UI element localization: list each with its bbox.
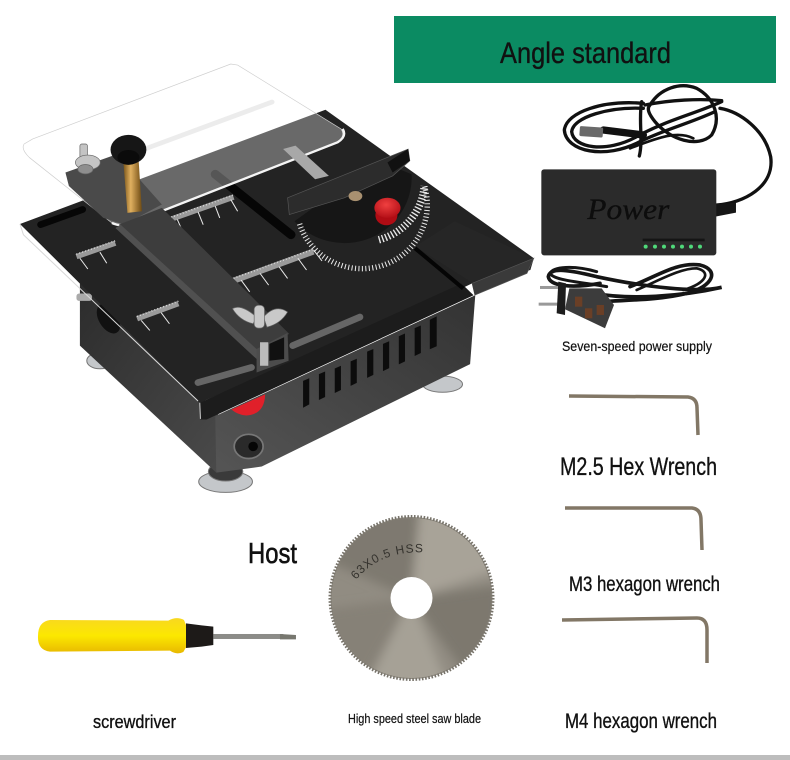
power switch	[231, 394, 265, 415]
label: seven-speed power supply: Seven-speed power supply	[562, 338, 712, 354]
DC plug	[579, 126, 603, 138]
mains cable	[548, 265, 722, 302]
red locking knob	[374, 198, 401, 225]
label: host: Host	[248, 538, 297, 570]
label: screwdriver: screwdriver	[93, 712, 176, 732]
vent slots	[303, 316, 437, 408]
power jack	[234, 434, 263, 458]
fence rail	[65, 154, 289, 372]
left side of base	[80, 282, 218, 473]
speed LEDs	[644, 245, 702, 249]
icon: M3 hex wrench	[565, 508, 702, 550]
blade marking: 63X0.5 HSS	[351, 544, 422, 578]
bottom gray bar	[0, 755, 790, 760]
illustration: saw blade	[328, 515, 494, 681]
label: M3 hexagon wrench: M3 hexagon wrench	[569, 573, 720, 596]
table plate	[20, 110, 534, 420]
ruler left lower	[137, 301, 178, 330]
illustration: screwdriver	[38, 618, 296, 653]
ruler left upper	[76, 241, 115, 269]
feet	[87, 353, 463, 492]
wing nut	[232, 305, 288, 328]
ruler middle	[231, 249, 322, 292]
heading banner	[394, 16, 776, 83]
illustration: seven-speed power supply	[539, 86, 771, 328]
ruler scales	[76, 195, 322, 330]
icon: M4 hex wrench	[562, 618, 707, 663]
icon: M2.5 hex wrench	[569, 396, 698, 435]
brass post with knob	[111, 135, 146, 213]
DC cable loops	[564, 86, 771, 205]
adapter body	[541, 169, 716, 255]
clear acrylic guard	[23, 64, 344, 225]
ruler upper	[165, 195, 238, 231]
label: M2.5 hex wrench: M2.5 Hex Wrench	[560, 453, 717, 481]
mains plug	[539, 282, 614, 328]
heading banner: Angle standard	[500, 37, 671, 70]
adapter body: Power	[586, 193, 670, 226]
thumb screw	[75, 144, 100, 174]
angle fence	[288, 149, 410, 215]
protractor dial	[294, 161, 427, 269]
label: saw blade: High speed steel saw blade	[348, 711, 481, 726]
front side of base	[215, 295, 475, 473]
table slots	[41, 174, 360, 383]
blade shading	[332, 518, 492, 678]
label: M4 hexagon wrench: M4 hexagon wrench	[565, 710, 717, 733]
side motor opening	[76, 294, 125, 337]
illustration: table saw host	[20, 64, 534, 492]
strain relief	[715, 203, 736, 217]
